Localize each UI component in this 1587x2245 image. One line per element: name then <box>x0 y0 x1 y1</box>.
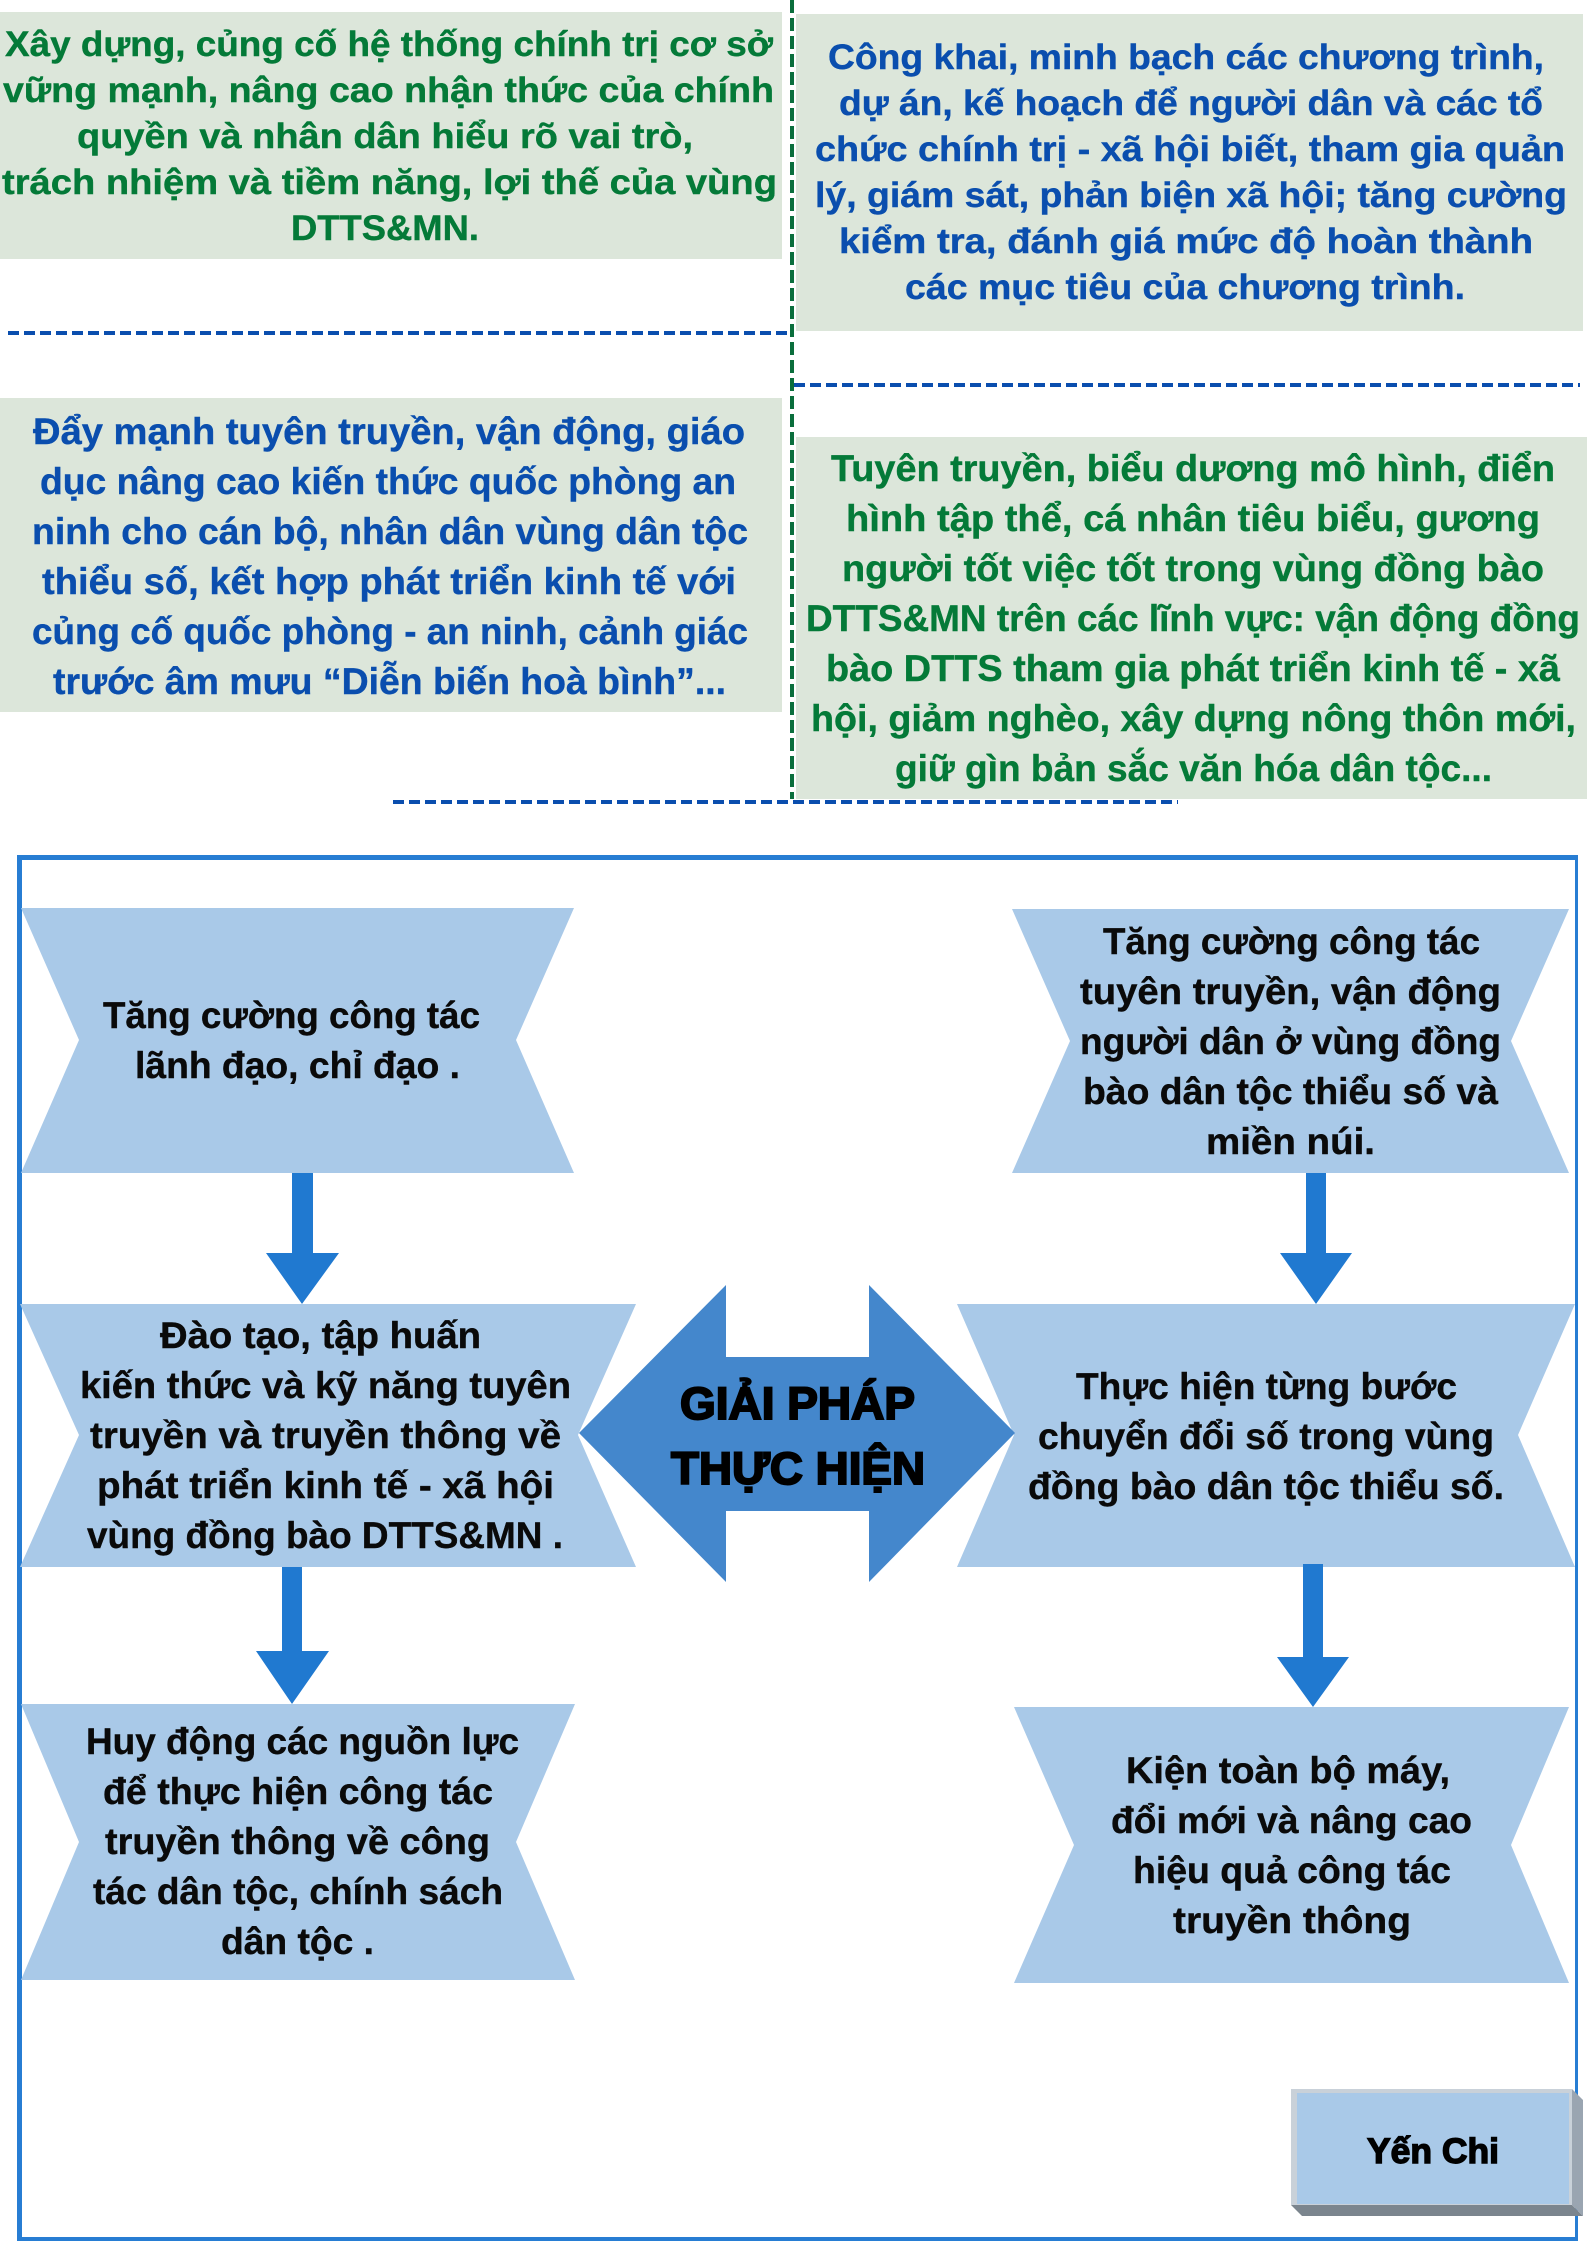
panel: strengthen political system: DTTS&MN. <box>291 209 479 248</box>
panel: national defence education: ninh cho cán bộ, nhân dân vùng dân tộc <box>32 511 748 552</box>
banner: leadership: lãnh đạo, chỉ đạo . <box>135 1045 460 1086</box>
panel: honouring model examples: Tuyên truyền, biểu dương mô hình, điển <box>831 448 1555 489</box>
banner: mobilise resources: truyền thông về công <box>105 1821 490 1862</box>
panel: strengthen political system: trách nhiệm và tiềm năng, lợi thế của vùng <box>2 163 777 202</box>
banner: propaganda: người dân ở vùng đồng <box>1080 1021 1501 1062</box>
panel: national defence education: thiểu số, kết hợp phát triển kinh tế với <box>42 561 736 602</box>
panel: strengthen political system: Xây dựng, củng cố hệ thống chính trị cơ sở <box>5 25 773 64</box>
panel: honouring model examples: bào DTTS tham gia phát triển kinh tế - xã <box>826 648 1560 689</box>
panel: honouring model examples: hội, giảm nghèo, xây dựng nông thôn mới, <box>811 698 1576 739</box>
banner: leadership <box>21 908 574 1173</box>
banner: propaganda: Tăng cường công tác <box>1103 921 1480 962</box>
banner: leadership: Tăng cường công tác <box>103 995 480 1036</box>
panel: transparency of programs: chức chính trị - xã hội biết, tham gia quản <box>815 130 1565 169</box>
center double arrow: solutions heading: GIẢI PHÁP <box>680 1378 915 1429</box>
author box: Yến Chi <box>1367 2132 1499 2171</box>
panel: transparency of programs: Công khai, minh bạch các chương trình, <box>828 38 1544 77</box>
panel: honouring model examples: hình tập thể, cá nhân tiêu biểu, gương <box>846 498 1540 539</box>
panel: transparency of programs <box>796 14 1583 331</box>
banner: propaganda <box>1012 909 1569 1173</box>
banner: training: truyền và truyền thông về <box>90 1415 561 1456</box>
banner: organisation: đổi mới và nâng cao <box>1111 1800 1472 1841</box>
banner: propaganda: bào dân tộc thiểu số và <box>1083 1071 1498 1112</box>
banner: mobilise resources: để thực hiện công tác <box>103 1771 493 1812</box>
banner: organisation: Kiện toàn bộ máy, <box>1126 1750 1450 1791</box>
center double arrow: solutions heading <box>579 1285 1015 1582</box>
banner: training <box>20 1304 636 1567</box>
arrow: propaganda to digital transformation <box>1280 1173 1352 1304</box>
banner: training: Đào tạo, tập huấn <box>160 1315 481 1356</box>
banner: training: vùng đồng bào DTTS&MN . <box>87 1515 563 1556</box>
arrow: training to resources <box>256 1567 329 1704</box>
banner: digital transformation: Thực hiện từng bước <box>1076 1366 1457 1407</box>
banner: mobilise resources: tác dân tộc, chính sách <box>93 1871 503 1912</box>
banner: organisation <box>1014 1707 1569 1983</box>
author box <box>1291 2089 1583 2216</box>
center double arrow: solutions heading: THỰC HIỆN <box>671 1443 925 1494</box>
banner: digital transformation <box>957 1304 1575 1567</box>
panel: strengthen political system: vững mạnh, nâng cao nhận thức của chính <box>3 71 774 110</box>
panel: honouring model examples <box>796 437 1587 799</box>
panel: transparency of programs: lý, giám sát, phản biện xã hội; tăng cường <box>815 176 1567 215</box>
panel: national defence education: Đẩy mạnh tuyên truyền, vận động, giáo <box>33 411 745 452</box>
banner: mobilise resources <box>21 1704 575 1980</box>
arrow: digital transformation to organisation <box>1277 1564 1349 1707</box>
panel: honouring model examples: DTTS&MN trên các lĩnh vực: vận động đồng <box>806 598 1580 639</box>
banner: organisation: hiệu quả công tác <box>1133 1850 1451 1891</box>
banner: training: kiến thức và kỹ năng tuyên <box>80 1365 571 1406</box>
panel: transparency of programs: dự án, kế hoạch để người dân và các tổ <box>839 84 1543 123</box>
banner: digital transformation: chuyển đổi số trong vùng <box>1038 1416 1494 1457</box>
banner: mobilise resources: Huy động các nguồn lực <box>86 1721 519 1762</box>
banner: propaganda: miền núi. <box>1206 1121 1375 1162</box>
banner: mobilise resources: dân tộc . <box>221 1921 374 1962</box>
panel: honouring model examples: giữ gìn bản sắc văn hóa dân tộc... <box>895 747 1492 789</box>
banner: digital transformation: đồng bào dân tộc thiểu số. <box>1028 1466 1504 1507</box>
arrow: leadership to training <box>266 1173 339 1304</box>
panel: national defence education: dục nâng cao kiến thức quốc phòng an <box>40 461 736 502</box>
panel: national defence education: củng cố quốc phòng - an ninh, cảnh giác <box>32 611 748 652</box>
panel: strengthen political system: quyền và nhân dân hiểu rõ vai trò, <box>77 117 693 156</box>
banner: propaganda: tuyên truyền, vận động <box>1080 971 1501 1012</box>
panel: transparency of programs: các mục tiêu của chương trình. <box>905 268 1465 307</box>
banner: organisation: truyền thông <box>1173 1900 1411 1941</box>
panel: honouring model examples: người tốt việc tốt trong vùng đồng bào <box>842 548 1544 589</box>
panel: national defence education: trước âm mưu “Diễn biến hoà bình”... <box>53 661 726 702</box>
panel: national defence education <box>0 398 782 712</box>
panel: strengthen political system <box>0 12 782 259</box>
panel: transparency of programs: kiểm tra, đánh giá mức độ hoàn thành <box>839 222 1533 261</box>
banner: training: phát triển kinh tế - xã hội <box>97 1465 554 1506</box>
